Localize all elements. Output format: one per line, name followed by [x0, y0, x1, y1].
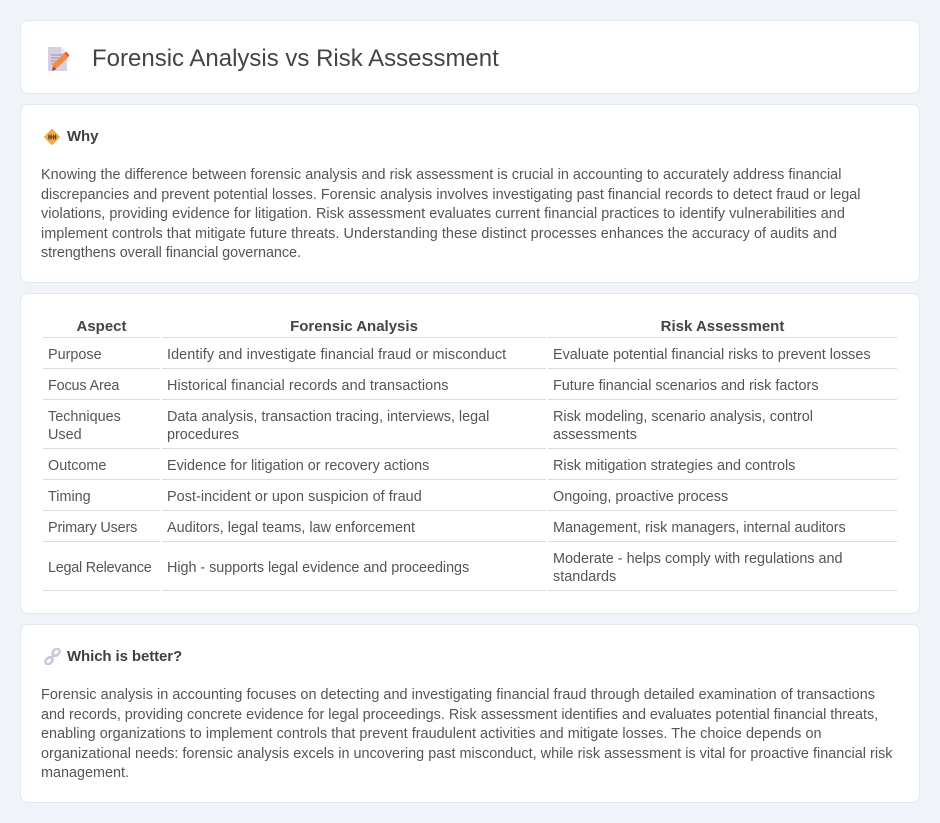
row: legal relevance	[48, 551, 843, 585]
text block: why paragraph: strengthens overall financial governance.	[41, 245, 301, 261]
row: legal relevance: High - supports legal evidence and proceedings	[167, 560, 469, 576]
row: techniques used: Used	[48, 427, 82, 443]
row: techniques used	[48, 409, 813, 443]
table header: aspect: Aspect	[76, 318, 127, 335]
row: focus area: Historical financial records and transactions	[167, 378, 449, 394]
row: timing	[48, 489, 728, 505]
row: purpose	[48, 347, 871, 363]
row: purpose: Identify and investigate financial fraud or misconduct	[167, 347, 506, 363]
text block: which is better paragraph: management.	[41, 765, 129, 781]
icon: warning diamond	[44, 129, 60, 145]
row: techniques used: Techniques	[48, 409, 121, 425]
text block: why paragraph	[41, 167, 860, 261]
row: techniques used: Risk modeling, scenario analysis, control	[553, 409, 813, 425]
row: legal relevance: Legal Relevance	[48, 560, 151, 576]
icon: chain link	[44, 648, 61, 665]
heading: why: Why	[67, 128, 98, 145]
row: timing: Timing	[48, 489, 91, 505]
row: focus area: Focus Area	[48, 378, 119, 394]
row: legal relevance: standards	[553, 569, 616, 585]
row: outcome	[48, 458, 795, 474]
row: purpose: Evaluate potential financial risks to prevent losses	[553, 347, 871, 363]
row: techniques used: assessments	[553, 427, 637, 443]
row: legal relevance: Moderate - helps comply with regulations and	[553, 551, 843, 567]
table header: forensic analysis: Forensic Analysis	[290, 318, 418, 335]
title: Forensic Analysis vs Risk Assessment	[92, 45, 499, 72]
heading: which is better: Which is better?	[67, 648, 182, 665]
row: primary users: Management, risk managers, internal auditors	[553, 520, 846, 536]
panel: why	[20, 104, 920, 283]
row: timing: Ongoing, proactive process	[553, 489, 728, 505]
text block: why paragraph: Knowing the difference between forensic analysis and risk assessment is crucial in accounting to accurately address financial	[41, 167, 841, 183]
row: primary users: Auditors, legal teams, law enforcement	[167, 520, 415, 536]
text block: which is better paragraph: and records, providing concrete evidence for legal proceedings. Risk assessment identifies and evaluates potential financial threats,	[41, 706, 878, 722]
panel: title card	[20, 20, 920, 94]
row: outcome: Outcome	[48, 458, 106, 474]
row: primary users: Primary Users	[48, 520, 137, 536]
panel: which is better	[20, 624, 920, 803]
icon: document with pencil	[48, 47, 70, 71]
text block: which is better paragraph: enabling organizations to implement controls that prevent fraudulent activities and mitigate losses. The choice depends on	[41, 726, 822, 742]
table header: risk assessment: Risk Assessment	[661, 318, 784, 335]
row: primary users	[48, 520, 846, 536]
text block: which is better paragraph: organizational needs: forensic analysis excels in uncovering past misconduct, while risk assessment is vital for proactive financial risk	[41, 746, 893, 762]
row: techniques used: Data analysis, transaction tracing, interviews, legal	[167, 409, 489, 425]
text block: which is better paragraph	[41, 687, 893, 781]
row: timing: Post-incident or upon suspicion of fraud	[167, 489, 422, 505]
row: purpose: Purpose	[48, 347, 102, 363]
text block: which is better paragraph: Forensic analysis in accounting focuses on detecting and investigating financial fraud through detailed examination of transactions	[41, 687, 875, 703]
text block: why paragraph: discrepancies and prevent potential losses. Forensic analysis involves investigating past financial records to detect fraud or legal	[41, 186, 860, 202]
comparison table	[43, 318, 897, 591]
panel: comparison table	[20, 293, 920, 614]
row: focus area: Future financial scenarios and risk factors	[553, 378, 819, 394]
text block: why paragraph: violations, providing evidence for litigation. Risk assessment evaluates current financial practices to identify vulnerabilities and	[41, 206, 845, 222]
row: focus area	[48, 378, 819, 394]
text block: why paragraph: implement controls that mitigate future threats. Understanding these distinct processes enhances the accuracy of audits and	[41, 226, 837, 242]
row: techniques used: procedures	[167, 427, 239, 443]
row: outcome: Evidence for litigation or recovery actions	[167, 458, 429, 474]
row: outcome: Risk mitigation strategies and controls	[553, 458, 795, 474]
